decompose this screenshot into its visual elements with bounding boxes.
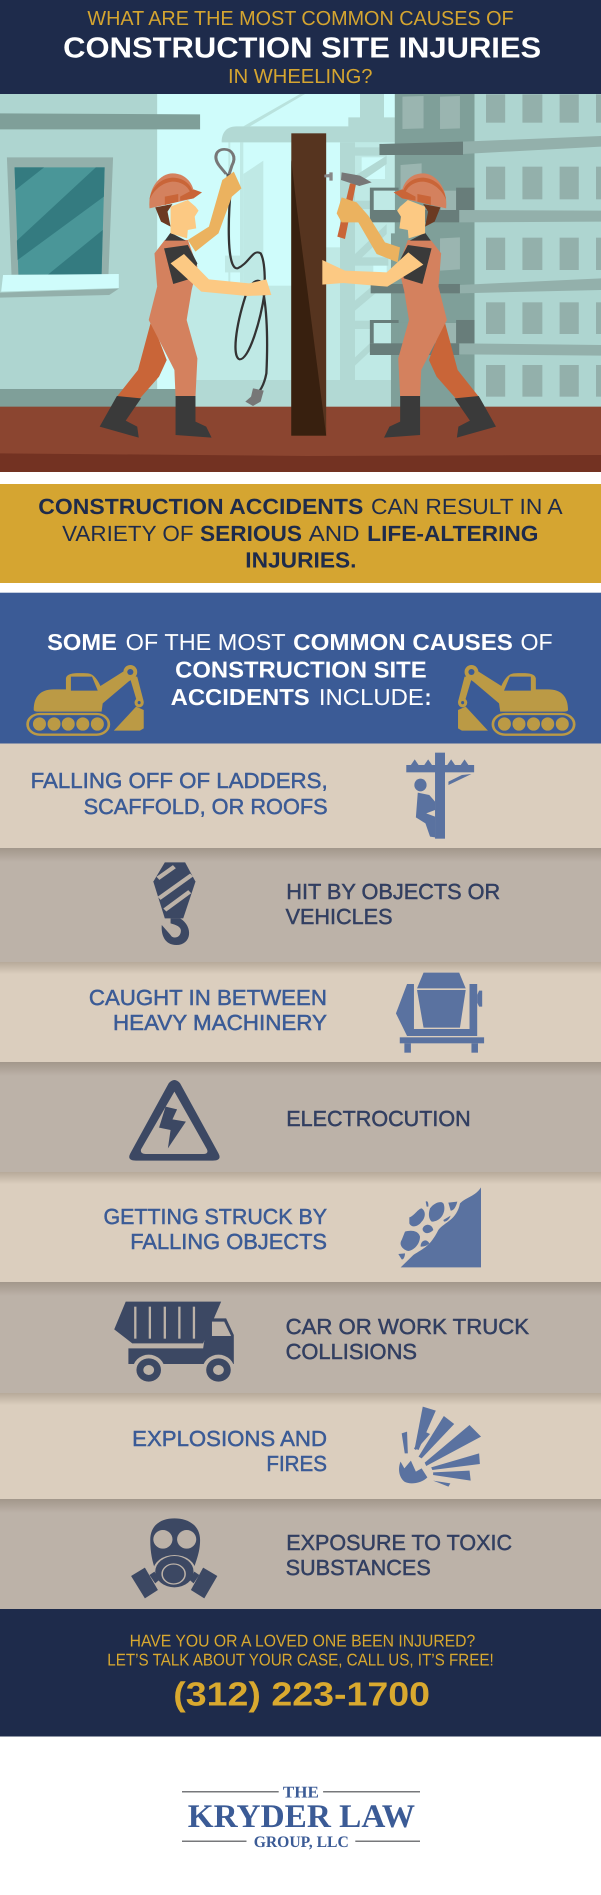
intro text: COMMON CAUSES <box>293 629 513 655</box>
callout text <box>38 494 563 573</box>
logo: The Kryder Law Group: THE <box>283 1783 319 1802</box>
row text: FALLING OFF OF LADDERS, <box>31 768 328 793</box>
intro text: SOME <box>47 629 117 655</box>
row text <box>104 1204 327 1254</box>
row: exposure to toxic substances <box>0 1499 601 1609</box>
row: hit by objects or vehicles <box>0 848 601 962</box>
window <box>0 157 119 298</box>
hammer <box>324 172 400 262</box>
row text: SUBSTANCES <box>286 1555 431 1580</box>
header panel <box>0 0 601 94</box>
worker right <box>322 172 496 438</box>
cable <box>216 149 267 406</box>
intro text: OF <box>520 629 553 655</box>
row text: FALLING OBJECTS <box>130 1229 327 1254</box>
heading line 3: IN WHEELING? <box>228 66 372 88</box>
scene foreground <box>0 94 601 472</box>
phone number: (312) 223-1700 <box>173 1677 430 1714</box>
icon: excavator right <box>458 665 574 735</box>
row text <box>286 879 500 929</box>
row: car or work truck collisions <box>0 1282 601 1393</box>
row text: HEAVY MACHINERY <box>113 1010 327 1035</box>
row text: VEHICLES <box>286 904 392 929</box>
row text: HIT BY OBJECTS OR <box>286 879 500 904</box>
row text: COLLISIONS <box>286 1339 417 1364</box>
intro text: INCLUDE <box>319 684 424 710</box>
row text <box>31 768 328 819</box>
intro text: ACCIDENTS <box>171 684 310 710</box>
icon: crane hook <box>153 862 195 945</box>
call to action text line 2: LET’S TALK ABOUT YOUR CASE, CALL US, IT’S FREE! <box>107 1651 494 1670</box>
row text: EXPOSURE TO TOXIC <box>286 1530 512 1555</box>
gold callout band <box>0 484 601 583</box>
row text: GETTING STRUCK BY <box>104 1204 327 1229</box>
intro text: OF THE MOST <box>126 629 286 655</box>
callout text: CONSTRUCTION ACCIDENTS <box>38 494 363 519</box>
row text: SCAFFOLD, OR ROOFS <box>84 794 328 819</box>
icon: high voltage triangle <box>129 1080 220 1161</box>
row: getting struck by falling objects <box>0 1172 601 1282</box>
icon: explosion <box>399 1407 481 1487</box>
callout text: INJURIES. <box>245 548 356 573</box>
callout text: VARIETY OF <box>62 521 194 546</box>
row text: EXPLOSIONS AND <box>132 1426 327 1451</box>
row text: CAUGHT IN BETWEEN <box>89 985 327 1010</box>
callout text: SERIOUS <box>200 521 302 546</box>
crane and scaffold background <box>183 94 397 407</box>
right building <box>370 94 601 407</box>
row: falling off of ladders <box>0 744 601 848</box>
icon: dump truck <box>114 1302 235 1385</box>
illustration: two construction workers at a post <box>0 94 601 472</box>
intro text: : <box>424 684 432 710</box>
callout text: CAN RESULT IN A <box>371 494 563 519</box>
callout text: LIFE-ALTERING <box>367 521 538 546</box>
row text <box>132 1426 327 1476</box>
icon: cement mixer <box>396 973 484 1053</box>
row text <box>286 1530 512 1580</box>
heading line 1: WHAT ARE THE MOST COMMON CAUSES OF <box>87 8 514 30</box>
ground <box>0 407 601 472</box>
intro text <box>47 629 553 710</box>
icon: rockslide <box>398 1187 481 1267</box>
row: explosions and fires <box>0 1393 601 1499</box>
blue intro panel <box>0 593 601 744</box>
row text <box>89 985 327 1035</box>
left building <box>0 94 200 407</box>
logo: The Kryder Law Group: GROUP, LLC <box>254 1834 349 1851</box>
icon: excavator left <box>28 665 144 735</box>
icon: gas mask <box>131 1518 217 1598</box>
row text: ELECTROCUTION <box>286 1106 471 1131</box>
row: electrocution <box>0 1062 601 1172</box>
wooden post <box>291 133 326 436</box>
heading line 2: CONSTRUCTION SITE INJURIES <box>63 32 541 64</box>
icon: lineman on pole <box>406 753 474 839</box>
logo: The Kryder Law Group <box>182 1783 420 1851</box>
callout text: AND <box>309 521 360 546</box>
row text: CAR OR WORK TRUCK <box>286 1314 529 1339</box>
intro text: CONSTRUCTION SITE <box>175 656 427 682</box>
row: caught in between heavy machinery <box>0 962 601 1062</box>
footer call to action panel <box>0 1609 601 1736</box>
worker left <box>100 172 271 438</box>
call to action text: HAVE YOU OR A LOVED ONE BEEN INJURED? <box>130 1632 475 1651</box>
row text <box>286 1314 529 1364</box>
logo: The Kryder Law Group: KRYDER LAW <box>188 1799 415 1835</box>
row text: FIRES <box>266 1451 327 1476</box>
